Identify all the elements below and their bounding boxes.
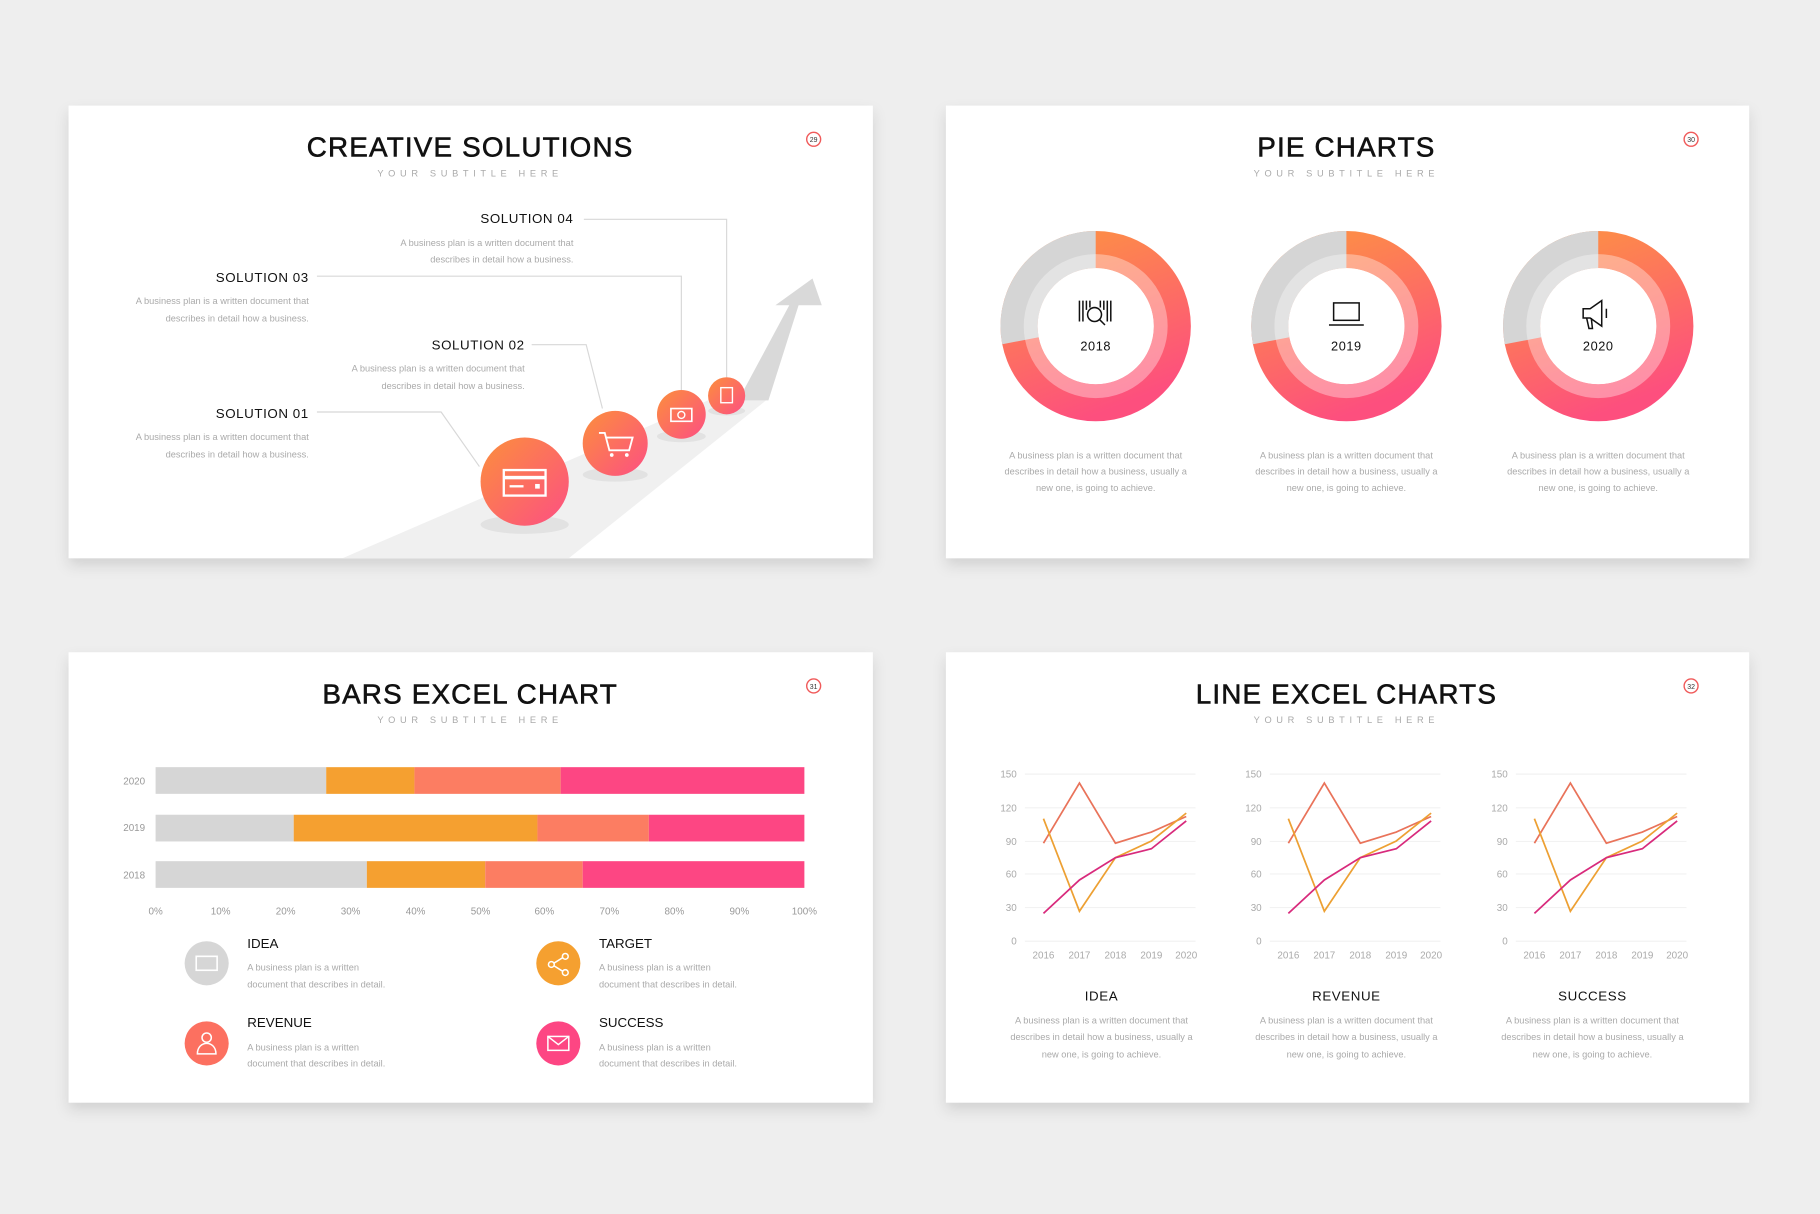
legend: target [536, 936, 737, 990]
legend: revenue: document that describes in detail. [247, 1059, 385, 1069]
line chart: success: 2017 [1559, 951, 1581, 962]
panel: creative solutions [69, 106, 873, 558]
legend: success: SUCCESS [599, 1015, 664, 1030]
page number 31 [807, 679, 821, 693]
line chart: success: 2018 [1595, 951, 1618, 962]
solution 02 text: A business plan is a written document that [352, 363, 525, 373]
line chart: revenue: REVENUE [1312, 988, 1381, 1003]
solution 01 text: SOLUTION 01 [216, 406, 309, 421]
line chart: idea: 150 [1000, 770, 1017, 781]
legend: idea: A business plan is a written [247, 962, 359, 972]
line chart: idea: 90 [1006, 837, 1017, 848]
line chart: success: 0 [1502, 937, 1508, 948]
line chart: idea: 0 [1011, 937, 1017, 948]
bar chart [123, 767, 817, 918]
bar chart: 2020 [123, 777, 146, 788]
connector lines [317, 219, 727, 467]
line chart: revenue: 2019 [1385, 951, 1408, 962]
bar chart: 100% [792, 907, 817, 918]
line chart: idea: new one, is going to achieve. [1042, 1049, 1161, 1059]
page number 30: 30 [1687, 137, 1695, 144]
solution 03 text: describes in detail how a business. [166, 313, 309, 323]
title: bars excel chart: BARS EXCEL CHART [322, 678, 618, 709]
line chart: idea: 60 [1006, 869, 1017, 880]
line chart: revenue: describes in detail how a business, usually a [1255, 1032, 1438, 1042]
donut 2018: 2018 [1080, 339, 1111, 354]
legend: target: TARGET [599, 936, 652, 951]
line chart: success [1491, 770, 1689, 1059]
legend: idea: IDEA [247, 936, 279, 951]
solution 03 text: SOLUTION 03 [216, 270, 309, 285]
title: line excel charts: LINE EXCEL CHARTS [1196, 678, 1497, 709]
page number 29: 29 [810, 137, 818, 144]
icon: barcode [1079, 301, 1111, 325]
bar chart: 40% [406, 907, 426, 918]
panel: bars excel chart [69, 652, 873, 1103]
line chart: revenue: A business plan is a written document that [1260, 1016, 1433, 1026]
bar chart: 20% [276, 907, 296, 918]
bar chart: 70% [600, 907, 620, 918]
legend: revenue: REVENUE [247, 1015, 312, 1030]
line chart: idea: 2016 [1033, 951, 1055, 962]
line chart: success: 2016 [1523, 951, 1546, 962]
line chart: revenue: 2018 [1349, 951, 1372, 962]
solution 04 text: A business plan is a written document that [400, 238, 574, 248]
legend: idea: document that describes in detail. [247, 980, 385, 990]
line chart: success: A business plan is a written document that [1506, 1016, 1679, 1026]
line chart: revenue: 0 [1256, 937, 1262, 948]
donut 2020: 2020 [1583, 339, 1614, 354]
line chart: success: 30 [1497, 903, 1508, 914]
page number 29 [807, 132, 821, 146]
page number 30 [1684, 132, 1698, 146]
legend: revenue: A business plan is a written [247, 1042, 359, 1052]
solution 03 text [136, 270, 309, 323]
legend: target: A business plan is a written [599, 962, 711, 972]
donut 2019 [1270, 250, 1423, 403]
panel: line excel charts [946, 652, 1749, 1103]
solution 01 text: A business plan is a written document that [136, 432, 309, 442]
icon: megaphone [1583, 301, 1606, 328]
legend: revenue [185, 1015, 385, 1069]
title: creative solutions: CREATIVE SOLUTIONS [307, 132, 633, 163]
line chart: idea [1000, 770, 1198, 1059]
bar chart: 60% [535, 907, 555, 918]
line chart: success: 2019 [1631, 951, 1654, 962]
line chart: success: SUCCESS [1558, 988, 1627, 1003]
subtitle: YOUR SUBTITLE HERE [1254, 168, 1439, 178]
sphere 3: money [657, 390, 706, 442]
solution 03 text: A business plan is a written document that [136, 296, 309, 306]
legend: success: A business plan is a written [599, 1042, 711, 1052]
subtitle: YOUR SUBTITLE HERE [1254, 715, 1439, 725]
subtitle: YOUR SUBTITLE HERE [377, 168, 563, 178]
solution 01 text: describes in detail how a business. [166, 449, 309, 459]
line chart: idea: 2020 [1175, 951, 1198, 962]
page number 32 [1684, 679, 1698, 693]
bar chart: 80% [665, 907, 684, 918]
solution 04 text: SOLUTION 04 [480, 211, 573, 226]
line chart: success: 90 [1497, 837, 1508, 848]
sphere 4: document [708, 377, 745, 415]
bar chart: 2019 [123, 823, 146, 834]
solution 04 text: describes in detail how a business. [430, 254, 573, 264]
panel: pie charts [946, 106, 1749, 558]
subtitle: YOUR SUBTITLE HERE [377, 715, 563, 725]
pie descriptions: describes in detail how a business, usually a [1255, 467, 1438, 477]
bar chart: 10% [211, 907, 231, 918]
legend: target: document that describes in detail. [599, 980, 737, 990]
legend: success: document that describes in detail. [599, 1059, 737, 1069]
solution 02 text: SOLUTION 02 [432, 337, 525, 352]
line chart: idea: 120 [1000, 803, 1017, 814]
line chart: success: new one, is going to achieve. [1533, 1049, 1652, 1059]
line chart: revenue: 120 [1245, 803, 1262, 814]
road [342, 400, 766, 558]
icon: laptop [1329, 303, 1364, 325]
line chart: idea: describes in detail how a business, usually a [1010, 1032, 1194, 1042]
pie descriptions: describes in detail how a business, usually a [1005, 467, 1188, 477]
solution 02 text [352, 337, 525, 391]
line chart: idea: IDEA [1085, 988, 1118, 1003]
line chart: idea: 2017 [1068, 951, 1090, 962]
pie descriptions: A business plan is a written document that [1009, 450, 1183, 460]
line chart: revenue [1245, 770, 1443, 1059]
sphere 1: card [481, 438, 569, 534]
line chart: revenue: 2017 [1313, 951, 1335, 962]
donut 2020 [1522, 250, 1675, 403]
sphere 2: cart [583, 411, 648, 482]
line chart: revenue: 60 [1251, 869, 1262, 880]
bar chart: 90% [730, 907, 749, 918]
donut 2018 [1019, 250, 1172, 403]
page number 32: 32 [1687, 684, 1695, 691]
line chart: success: 120 [1491, 803, 1508, 814]
legend: success [536, 1015, 737, 1069]
pie descriptions: new one, is going to achieve. [1287, 483, 1406, 493]
line chart: idea: 30 [1006, 903, 1017, 914]
pie descriptions: A business plan is a written document that [1512, 450, 1685, 460]
arrow [738, 279, 822, 400]
pie descriptions [1005, 450, 1690, 493]
line chart: revenue: 2016 [1277, 951, 1300, 962]
line chart: revenue: 90 [1251, 837, 1262, 848]
line chart: success: 150 [1491, 770, 1508, 781]
legend: idea [185, 936, 385, 990]
line chart: revenue: 30 [1251, 903, 1262, 914]
bar chart: 50% [471, 907, 491, 918]
line chart: revenue: new one, is going to achieve. [1287, 1049, 1406, 1059]
line chart: revenue: 150 [1245, 770, 1262, 781]
pie descriptions: new one, is going to achieve. [1036, 483, 1155, 493]
title: pie charts: PIE CHARTS [1257, 132, 1435, 163]
line chart: idea: 2019 [1140, 951, 1163, 962]
pie descriptions: new one, is going to achieve. [1538, 483, 1658, 493]
solution 01 text [136, 406, 309, 459]
line chart: idea: 2018 [1104, 951, 1127, 962]
line chart: idea: A business plan is a written document that [1015, 1016, 1188, 1026]
line chart: success: 2020 [1666, 951, 1689, 962]
line chart: success: describes in detail how a business, usually a [1501, 1032, 1684, 1042]
bar chart: 2018 [123, 871, 146, 882]
donut 2019: 2019 [1331, 339, 1362, 354]
line chart: revenue: 2020 [1420, 951, 1443, 962]
pie descriptions: A business plan is a written document that [1260, 450, 1433, 460]
pie descriptions: describes in detail how a business, usually a [1507, 467, 1690, 477]
page number 31: 31 [810, 684, 818, 691]
solution 04 text [400, 211, 574, 264]
line chart: success: 60 [1497, 869, 1508, 880]
bar chart: 30% [341, 907, 361, 918]
bar chart: 0% [148, 907, 163, 918]
solution 02 text: describes in detail how a business. [381, 381, 525, 391]
